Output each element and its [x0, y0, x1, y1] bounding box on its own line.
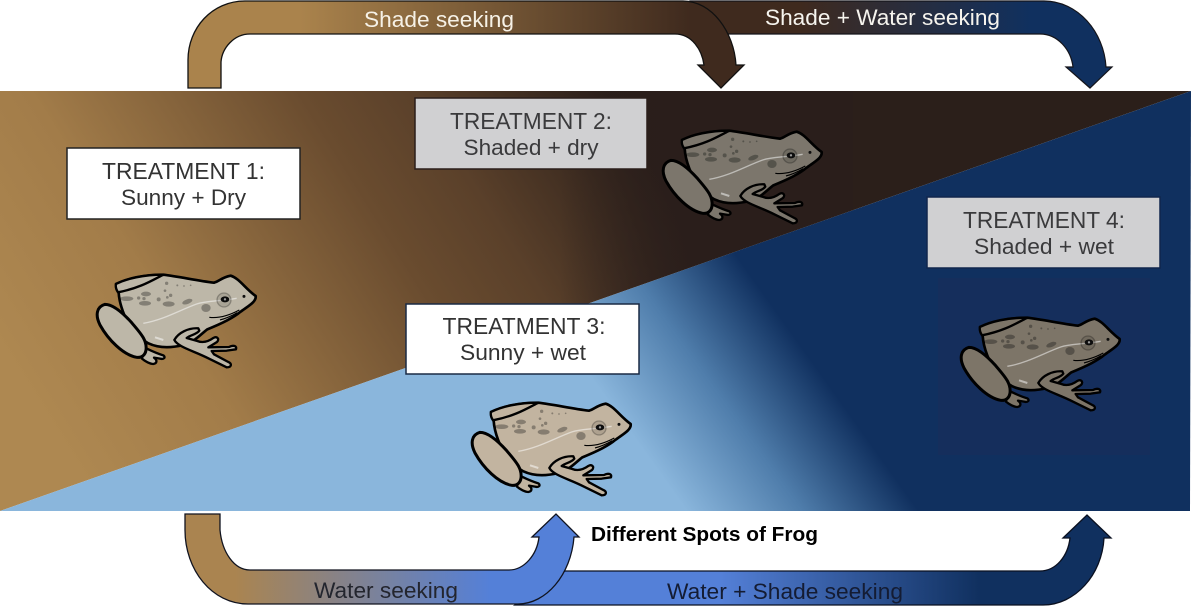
panel: treatment 4: Shaded + wet: [974, 234, 1114, 259]
background: sunny and dry to shaded and dry triangle: [0, 91, 1191, 511]
label: shade seeking: Shade seeking: [364, 7, 514, 32]
arrow: water seeking: [185, 514, 579, 604]
arrow: shade seeking: [188, 1, 744, 88]
panel: treatment 1: TREATMENT 1:: [102, 158, 265, 184]
panel: treatment 4: TREATMENT 4:: [963, 207, 1125, 233]
arrow: shade and water seeking: [690, 1, 1112, 88]
label: shade and water seeking: Shade + Water seeking: [765, 5, 1000, 30]
label: water and shade seeking: Water + Shade seeking: [667, 579, 903, 604]
icon: frog in treatment 3: [472, 403, 631, 495]
panel: treatment 2: TREATMENT 2:: [450, 108, 612, 134]
label: water seeking: Water seeking: [314, 578, 458, 603]
panel: treatment 3: Sunny + wet: [460, 340, 586, 365]
panel: treatment 2: Shaded + dry: [464, 135, 598, 160]
panel: treatment 4: [927, 197, 1160, 268]
panel: treatment 1: [67, 148, 300, 219]
icon: frog in treatment 4: [961, 318, 1120, 410]
background: sunny and wet to shaded and wet triangle: [0, 91, 1191, 511]
background patch behind frog 4: [938, 278, 1150, 455]
icon: frog in treatment 2: [663, 131, 822, 223]
icon: frog in treatment 1: [97, 275, 256, 367]
panel: treatment 3: [406, 304, 639, 374]
panel: treatment 3: TREATMENT 3:: [442, 313, 606, 339]
caption: different spots of frog: Different Spots of Frog: [591, 524, 818, 546]
panel: treatment 2: [415, 98, 647, 169]
panel: treatment 1: Sunny + Dry: [121, 185, 246, 210]
arrow: water and shade seeking: [515, 515, 1111, 605]
background patch behind frog 2: [560, 91, 853, 314]
